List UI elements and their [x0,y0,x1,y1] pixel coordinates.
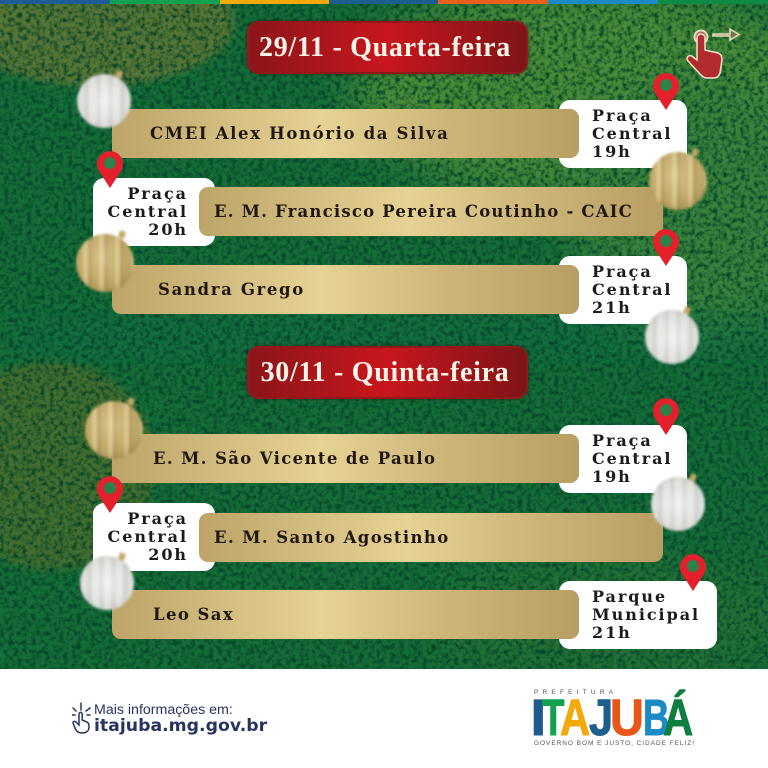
place box: Central [592,124,672,143]
logo: Prefeitura Itajubá: B [643,690,670,746]
event bar [112,590,579,639]
heading: 30/11: 30/11 - Quinta-feira [261,357,509,388]
icon: hand swipe [686,28,740,79]
place box: 21h [592,298,632,317]
place box [559,581,717,649]
place box: Municipal [592,605,700,624]
text: more information: Mais informações em: [94,702,233,718]
event bar [199,187,663,236]
icon: clicking hand [72,702,91,734]
place box: Central [592,280,672,299]
place box [559,425,687,493]
ornament: gold left second [85,401,143,459]
event bar [199,513,663,562]
heading: 29/11 [247,21,528,74]
row: E. M. Francisco Pereira Coutinho - CAIC [93,151,663,246]
place box: Central [108,202,188,221]
event bar: Leo Sax [153,605,234,624]
logo: Prefeitura Itajubá: Á [663,689,693,746]
logo: Prefeitura Itajubá: U [610,690,644,746]
event bar: Sandra Grego [158,280,305,299]
place box: Central [108,527,188,546]
icon: pin [97,476,123,513]
heading: 29/11: 29/11 - Quarta-feira [259,32,511,63]
place box: 21h [592,623,632,642]
event bar [112,109,579,158]
logo: Prefeitura Itajubá: I [530,689,546,746]
place box [93,178,215,246]
place box: 19h [592,142,632,161]
ornament: silver left [80,556,134,610]
place box: Praça [592,262,653,281]
ornament: gold left [76,234,134,292]
place box [559,100,687,168]
place box [559,256,687,324]
place box: Parque [592,587,667,606]
place box: Praça [127,184,188,203]
place box: 20h [148,220,188,239]
logo: Prefeitura Itajubá [530,689,694,747]
ornament: gold right [649,152,707,210]
top colour stripe [0,0,768,4]
logo: Prefeitura Itajubá: T [542,690,564,746]
event bar [112,265,579,314]
icon: pin [97,151,123,188]
event bar: E. M. São Vicente de Paulo [153,449,436,468]
event bar: E. M. Francisco Pereira Coutinho - CAIC [214,202,633,221]
ornament: silver right [645,310,699,364]
row: Sandra Grego [112,229,687,324]
icon: pin [680,554,706,591]
row: E. M. São Vicente de Paulo [112,398,687,493]
event bar [112,434,579,483]
row: CMEI Alex Honório da Silva [112,73,687,168]
place box: Praça [592,431,653,450]
place box: Praça [592,106,653,125]
place box: Praça [127,509,188,528]
logo: Prefeitura Itajubá: J [589,690,613,747]
logo: Prefeitura Itajubá: PREFEITURA [534,689,614,696]
logo: Prefeitura Itajubá: A [560,689,590,746]
icon: pin [653,398,679,435]
place box: 19h [592,467,632,486]
place box: Central [592,449,672,468]
heading: 30/11 [247,346,528,399]
row: Leo Sax [112,554,717,649]
row: E. M. Santo Agostinho [93,476,663,571]
place box [93,503,215,571]
text: website: itajuba.mg.gov.br [94,716,267,736]
icon: pin [653,73,679,110]
ornament: silver right second [651,477,705,531]
event bar: E. M. Santo Agostinho [214,528,450,547]
place box: 20h [148,545,188,564]
event bar: CMEI Alex Honório da Silva [150,124,450,143]
ornament: silver top [77,74,131,128]
logo: Prefeitura Itajubá: GOVERNO BOM E JUSTO, CIDADE FELIZ! [534,740,694,747]
footer panel [0,669,768,768]
icon: pin [653,229,679,266]
